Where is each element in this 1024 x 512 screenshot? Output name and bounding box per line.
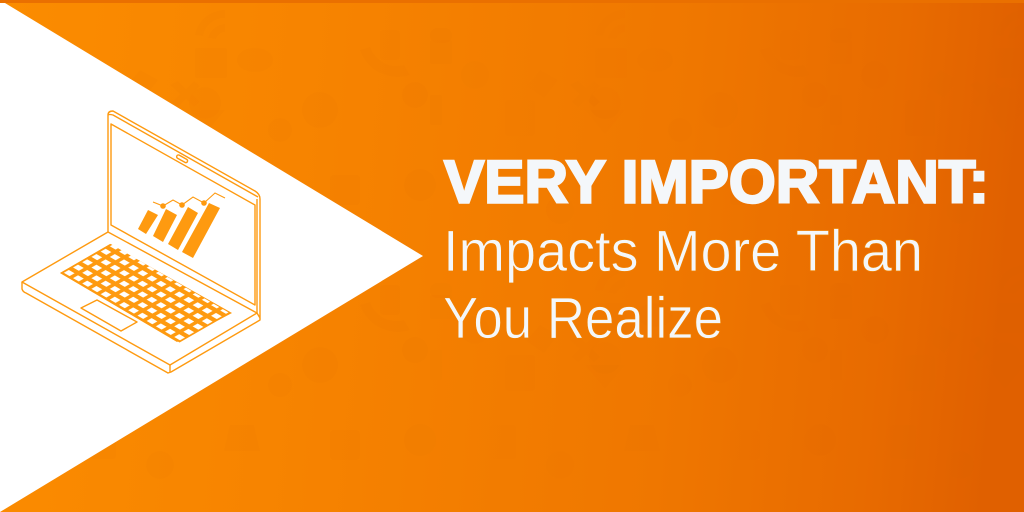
white triangle panel xyxy=(0,0,423,512)
keyboard xyxy=(60,244,232,343)
heading xyxy=(443,148,989,351)
bar chart on laptop screen xyxy=(138,193,225,258)
bars xyxy=(138,203,220,258)
heading line 3: You Realize xyxy=(443,286,723,351)
top edge band xyxy=(0,0,1024,3)
trend line with dots xyxy=(153,193,225,209)
trackpad xyxy=(81,300,137,331)
heading line 1: VERY IMPORTANT: xyxy=(444,148,989,216)
icon: laptop xyxy=(22,111,260,373)
laptop lid xyxy=(108,111,260,318)
heading line 2: Impacts More Than xyxy=(443,219,923,284)
laptop base xyxy=(22,232,260,373)
